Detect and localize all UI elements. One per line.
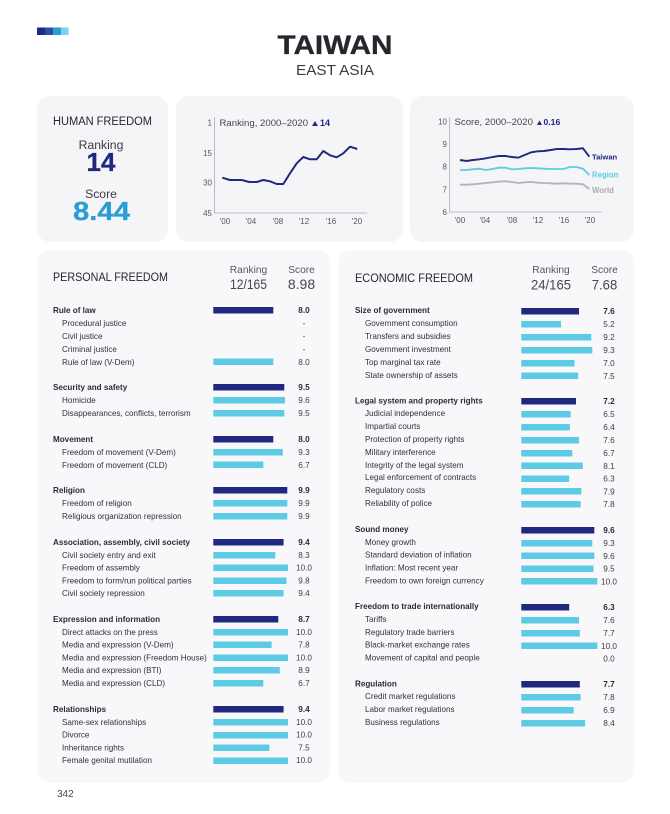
x axis labels: '04 [480, 216, 491, 225]
personal ranking: 12/165 [230, 276, 267, 292]
group: freedom to trade internationally: Tariffs [365, 615, 386, 624]
group: freedom to trade internationally: 10.0 [601, 642, 617, 651]
ranking label: Ranking [79, 138, 123, 152]
y axis labels: 10 [438, 118, 448, 126]
group: rule of law: 8.0 [298, 306, 310, 315]
x axis labels: '12 [533, 216, 544, 225]
group: legal system and property rights: 7.6 [603, 436, 615, 445]
group: legal system and property rights: 6.7 [603, 449, 615, 458]
group: freedom to trade internationally: Movement of capital and people [365, 654, 480, 662]
group: size of government: State ownership of assets [365, 371, 458, 380]
economic ranking: Ranking [532, 265, 570, 276]
group: sound money: 10.0 [601, 578, 617, 586]
group: expression and information: 10.0 [296, 628, 312, 637]
y axis labels [438, 118, 448, 217]
group: legal system and property rights: Impartial courts [365, 422, 420, 431]
score label: Score [85, 187, 117, 201]
group: expression and information: Expression and information [53, 615, 160, 624]
ranking value: 14 [87, 147, 116, 177]
group: relationships: Relationships [53, 705, 107, 714]
group: regulation: Business regulations [365, 718, 440, 727]
x axis labels: '16 [326, 217, 337, 226]
y axis labels: 45 [203, 209, 213, 218]
group: freedom to trade internationally: 7.7 [603, 629, 615, 638]
group: movement: 9.3 [298, 448, 310, 457]
group: legal system and property rights: 7.8 [603, 500, 615, 509]
group: rule of law: Criminal justice [62, 345, 117, 354]
group: expression and information: 7.8 [298, 640, 310, 650]
group: association, assembly, civil society: Association, assembly, civil society [53, 538, 191, 547]
y axis labels [203, 118, 213, 218]
personal ranking [230, 265, 268, 292]
x axis labels: '20 [585, 216, 596, 225]
y axis labels: 15 [203, 149, 213, 158]
personal score [288, 265, 315, 292]
icon: rank change triangle and value: 14 [320, 118, 330, 128]
group: expression and information: 8.7 [298, 615, 310, 624]
group: relationships: 7.5 [298, 744, 310, 752]
group: legal system and property rights: 7.2 [603, 397, 615, 406]
group: rule of law: Civil justice [62, 332, 103, 341]
group: size of government: Government investment [365, 345, 452, 354]
group: regulation: 7.7 [603, 680, 615, 689]
group: movement: Freedom of movement (CLD) [62, 461, 168, 470]
group: security and safety: 9.5 [298, 409, 310, 418]
group: regulation: Credit market regulations [365, 692, 455, 701]
group: sound money: 9.5 [603, 564, 615, 574]
icon: score change triangle and value: 0.16 [544, 117, 560, 127]
group: sound money: 9.3 [603, 539, 615, 548]
group: security and safety: Disappearances, conflicts, terrorism [62, 409, 191, 418]
line: region score [460, 167, 589, 175]
group: expression and information: 8.9 [298, 666, 310, 675]
group: religion: Religion [53, 486, 85, 495]
group: relationships: 10.0 [296, 730, 312, 740]
group: association, assembly, civil society: 9.4 [298, 538, 310, 547]
group: association, assembly, civil society: Freedom of assembly [62, 564, 141, 572]
x axis labels [455, 216, 596, 225]
group: legal system and property rights: Judicial independence [365, 409, 446, 418]
group: freedom to trade internationally: 7.6 [603, 616, 615, 625]
group: legal system and property rights: Legal enforcement of contracts [365, 473, 476, 482]
group: freedom to trade internationally: 6.3 [603, 603, 615, 612]
group: movement: 8.0 [298, 435, 310, 444]
group: legal system and property rights: 6.5 [603, 410, 615, 419]
group: movement [53, 435, 310, 470]
group: sound money: Sound money [355, 525, 409, 534]
group: relationships [53, 705, 312, 765]
score value: 8.44 [73, 196, 131, 226]
group: legal system and property rights: 8.1 [603, 462, 615, 471]
group: sound money: Money growth [365, 538, 416, 547]
group: security and safety: 9.5 [298, 383, 310, 392]
group: sound money: 9.6 [603, 526, 615, 535]
chart axes [450, 117, 602, 212]
group: sound money: Standard deviation of inflation [365, 550, 472, 560]
economic score: 7.68 [592, 276, 617, 292]
group: association, assembly, civil society: 10.0 [296, 564, 312, 572]
personal score: Score [288, 265, 315, 276]
economic ranking [531, 265, 571, 292]
x axis labels: '20 [352, 217, 363, 226]
group: relationships: Inheritance rights [62, 744, 124, 752]
personal ranking: Ranking [230, 265, 268, 276]
group: relationships: 10.0 [296, 756, 312, 765]
group: legal system and property rights: Legal system and property rights [355, 396, 483, 406]
group: association, assembly, civil society: 9.4 [298, 589, 310, 598]
group: regulation: Regulation [355, 680, 397, 688]
group: legal system and property rights: 7.9 [603, 488, 615, 496]
group: security and safety: Homicide [62, 396, 96, 405]
group: rule of law: - [303, 332, 306, 341]
group: regulation: 7.8 [603, 693, 615, 702]
group: relationships: Same-sex relationships [62, 718, 146, 727]
group: regulation: 6.9 [603, 706, 615, 715]
group: religion [53, 486, 310, 521]
x axis labels: '08 [273, 217, 284, 226]
group: security and safety: 9.6 [298, 396, 310, 405]
group: expression and information: Media and expression (CLD) [62, 679, 165, 688]
chart axes [214, 117, 367, 213]
y axis labels: 1 [208, 118, 213, 128]
group: size of government: Top marginal tax rate [365, 358, 441, 367]
group: association, assembly, civil society: Civil society entry and exit [62, 551, 156, 560]
y axis labels: 8 [443, 162, 448, 172]
group: relationships: Female genital mutilation [62, 756, 152, 765]
x axis labels: '12 [299, 217, 310, 226]
group: security and safety [53, 383, 310, 418]
heading: personal freedom: PERSONAL FREEDOM [53, 272, 168, 284]
group: freedom to trade internationally [355, 602, 617, 664]
group: expression and information: Media and expression (BTI) [62, 666, 162, 675]
group: legal system and property rights: 6.3 [603, 474, 615, 484]
group: religion: Freedom of religion [62, 499, 132, 508]
group: rule of law: 8.0 [298, 358, 310, 367]
group: size of government [355, 306, 615, 381]
group: religion: Religious organization repression [62, 512, 182, 521]
group: expression and information: 10.0 [296, 654, 312, 662]
subtitle: EAST ASIA [296, 62, 374, 79]
line: Taiwan score [460, 148, 589, 161]
group: size of government: Transfers and subsidies [365, 332, 451, 341]
group: rule of law: Procedural justice [62, 319, 127, 328]
group: size of government: 7.6 [603, 307, 615, 316]
group: size of government: Size of government [355, 306, 430, 315]
group: relationships: 10.0 [296, 718, 312, 727]
group: movement: 6.7 [298, 461, 310, 470]
group: security and safety: Security and safety [53, 383, 128, 392]
group: rule of law: - [303, 319, 306, 328]
line: world score [460, 181, 589, 189]
economic score [591, 265, 618, 292]
heading: human freedom: HUMAN FREEDOM [53, 116, 152, 128]
group: religion: 9.9 [298, 512, 310, 521]
label: Taiwan: Taiwan [592, 152, 618, 162]
chart title: Ranking, 2000–2020 [220, 118, 308, 129]
group: sound money [355, 525, 617, 586]
x axis labels: '00 [455, 216, 466, 225]
x axis labels: '16 [559, 216, 570, 225]
group: expression and information: Media and expression (V-Dem) [62, 640, 174, 650]
label: Region: Region [592, 170, 619, 180]
title: TAIWAN [278, 30, 392, 60]
group: sound money: Inflation: Most recent year [365, 564, 458, 572]
group: association, assembly, civil society: 8.3 [298, 551, 310, 560]
chart title: Score, 2000–2020 [454, 117, 533, 128]
group: freedom to trade internationally: Freedom to trade internationally [355, 602, 479, 611]
group: sound money: Freedom to own foreign currency [365, 576, 485, 586]
group: legal system and property rights: Reliability of police [365, 499, 433, 508]
group: legal system and property rights: Protection of property rights [365, 435, 464, 444]
group: regulation: 8.4 [603, 719, 615, 728]
panel: personal freedom [37, 250, 330, 783]
group: expression and information [53, 615, 312, 688]
group: regulation: Labor market regulations [365, 705, 455, 714]
group: rule of law: - [303, 345, 306, 354]
label: World: World [592, 186, 614, 195]
group: size of government: Government consumption [365, 319, 458, 328]
group: size of government: 9.3 [603, 346, 615, 355]
group: legal system and property rights: Integrity of the legal system [365, 461, 464, 470]
y axis labels: 6 [443, 208, 448, 217]
heading: economic freedom: ECONOMIC FREEDOM [355, 273, 473, 285]
group: association, assembly, civil society: Civil society repression [62, 589, 145, 598]
page number: 342 [57, 789, 74, 800]
panel: economic freedom [338, 250, 634, 783]
group: rule of law: Rule of law [53, 306, 96, 315]
economic score: Score [591, 265, 618, 276]
personal score: 8.98 [288, 276, 315, 292]
x axis labels [220, 217, 363, 226]
group: movement: Movement [53, 435, 93, 444]
y axis labels: 9 [443, 140, 448, 149]
group: relationships: Divorce [62, 730, 90, 740]
x axis labels: '04 [246, 217, 257, 226]
group: religion: 9.9 [298, 499, 310, 508]
group: size of government: 7.5 [603, 372, 615, 381]
group: rule of law: Rule of law (V-Dem) [62, 358, 135, 367]
group: expression and information: Direct attacks on the press [62, 628, 158, 637]
y axis labels: 30 [203, 178, 213, 188]
group: freedom to trade internationally: 0.0 [603, 654, 615, 664]
panel: human freedom [37, 96, 168, 242]
group: expression and information: 6.7 [298, 679, 310, 688]
group: size of government: 9.2 [603, 333, 615, 342]
group: legal system and property rights [355, 396, 615, 509]
group: expression and information: Media and expression (Freedom House) [62, 654, 207, 662]
group: relationships: 9.4 [298, 705, 310, 714]
panel: score chart [410, 96, 634, 242]
group: rule of law [53, 306, 310, 367]
group: religion: 9.9 [298, 486, 310, 495]
group: legal system and property rights: Military interference [365, 448, 436, 457]
group: regulation [355, 680, 615, 728]
panel: ranking chart [176, 96, 403, 242]
group: association, assembly, civil society: 9.8 [298, 576, 310, 586]
group: legal system and property rights: Regulatory costs [365, 486, 425, 495]
x axis labels: '00 [220, 217, 231, 226]
x axis labels: '08 [507, 216, 518, 225]
group: movement: Freedom of movement (V-Dem) [62, 448, 176, 457]
y axis labels: 7 [443, 186, 448, 194]
icon: rank change triangle and value [312, 118, 330, 128]
group: freedom to trade internationally: Regulatory trade barriers [365, 628, 455, 637]
economic ranking: 24/165 [531, 276, 571, 292]
group: size of government: 5.2 [603, 320, 615, 329]
group: legal system and property rights: 6.4 [603, 423, 615, 432]
group: size of government: 7.0 [603, 359, 615, 368]
line: Taiwan ranking [222, 147, 357, 184]
group: sound money: 9.6 [603, 552, 615, 561]
logo swatches [37, 28, 68, 35]
group: freedom to trade internationally: Black-market exchange rates [365, 640, 470, 650]
group: association, assembly, civil society [53, 538, 312, 598]
group: association, assembly, civil society: Freedom to form/run political parties [62, 576, 192, 586]
